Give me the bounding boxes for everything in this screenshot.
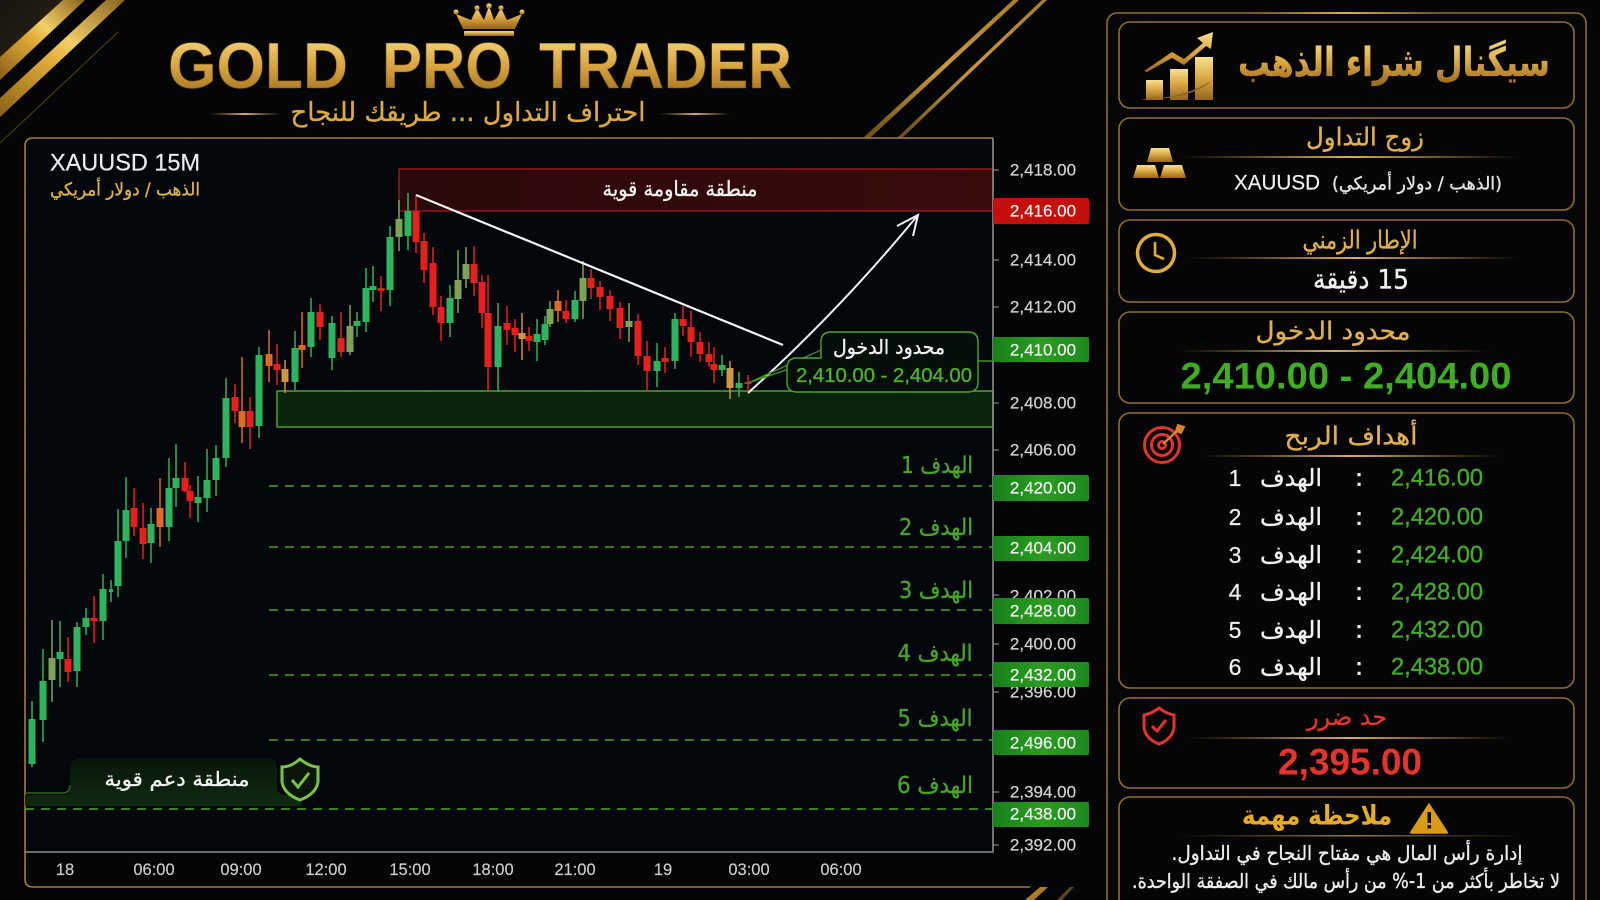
decorative gold stripes top left: [0, 0, 125, 143]
panel: header: [1119, 22, 1574, 108]
price tags: 2,404.00: [1010, 538, 1076, 558]
icon: gold bars: [1133, 148, 1186, 178]
panel: trading pair: (الذهب / دولار أمريكي): [1332, 172, 1502, 194]
target row 3: 3: [1229, 542, 1241, 568]
panel: price chart: [25, 138, 1089, 887]
panel: entry limit: 2,410.00 - 2,404.00: [1180, 356, 1512, 396]
target row 6: 2,438.00: [1391, 654, 1483, 680]
time axis labels: 06:00: [820, 861, 862, 879]
target lines with labels: [25, 453, 993, 809]
resistance zone: منطقة مقاومة قوية: [602, 177, 758, 201]
target lines with labels: الهدف 3: [899, 578, 973, 604]
panel: important note: ملاحظة مهمة: [1242, 800, 1392, 832]
panel: important note: لا تخاطر بأكثر من 1-% من رأس مالك في الصفقة الواحدة.: [1132, 867, 1560, 894]
target row 1: 2,416.00: [1391, 464, 1483, 492]
target lines with labels: الهدف 4: [898, 641, 972, 667]
entry callout: [748, 332, 993, 392]
icon: green shield: [282, 759, 318, 800]
panel: signal sidebar: [1107, 12, 1586, 900]
panel: entry limit: محدود الدخول: [1256, 316, 1410, 346]
icon: clock: [1138, 234, 1174, 272]
time axis labels: 15:00: [389, 861, 431, 879]
time axis labels: [56, 861, 862, 879]
target row 4: 4: [1229, 579, 1242, 605]
target row 2: 2: [1229, 504, 1241, 530]
target row 1: الهدف: [1260, 464, 1322, 492]
chart heading: symbol: الذهب / دولار أمريكي: [50, 178, 200, 200]
price axis: 2,408.00: [1010, 394, 1076, 412]
target row 5: :: [1356, 618, 1362, 642]
target row 6: 6: [1229, 654, 1241, 680]
arrow: upward projection: [748, 215, 918, 393]
price axis: 2,414.00: [1010, 250, 1076, 270]
time axis labels: 09:00: [220, 861, 262, 879]
panel: trading pair: [1119, 118, 1574, 210]
price tags: 2,438.00: [1010, 804, 1076, 824]
panel: timeframe: [1119, 220, 1574, 302]
price tags: 2,428.00: [1010, 602, 1076, 620]
target row 1: [1229, 464, 1483, 492]
target row 2: :: [1356, 504, 1362, 530]
support zone rectangle: [277, 391, 993, 427]
target row 5: الهدف: [1260, 616, 1322, 644]
target row 2: [1229, 503, 1483, 531]
decorative gold stripes top right: [863, 0, 1074, 900]
icon: rising chart: [1141, 32, 1213, 100]
target row 3: 2,424.00: [1391, 542, 1483, 568]
price axis: 2,402.00: [1010, 586, 1076, 606]
target row 4: الهدف: [1260, 578, 1322, 606]
support callout: منطقة دعم قوية: [104, 767, 250, 791]
price tags: 2,410.00: [1010, 340, 1076, 360]
time axis labels: 06:00: [133, 861, 175, 879]
icon: crown: [454, 3, 524, 36]
target lines with labels: الهدف 2: [899, 515, 973, 541]
target row 3: :: [1356, 542, 1362, 568]
target row 6: الهدف: [1260, 653, 1322, 681]
title: GOLD PRO TRADER: [168, 29, 792, 102]
target row 2: 2,420.00: [1391, 504, 1483, 530]
panel: stop loss: 2,395.00: [1278, 742, 1422, 782]
target row 3: الهدف: [1260, 541, 1322, 569]
target row 5: [1229, 616, 1483, 644]
entry callout: محدود الدخول: [833, 335, 945, 359]
target lines with labels: الهدف 6: [897, 773, 973, 799]
subtitle with flanking lines: احتراف التداول ... طريقك للنجاح: [290, 98, 646, 128]
panel: profit targets: [1119, 413, 1574, 688]
icon: red shield: [1144, 708, 1174, 744]
chart heading: symbol: [50, 150, 200, 200]
price axis: 2,392.00: [1010, 836, 1076, 854]
panel: stop loss: حد ضرر: [1306, 703, 1387, 731]
price axis: [25, 138, 1076, 854]
time axis labels: 03:00: [728, 861, 770, 879]
time axis labels: 18: [56, 861, 74, 879]
trend line: [416, 195, 783, 345]
panel: important note: [1119, 797, 1574, 900]
support callout: [25, 758, 302, 806]
resistance zone: [399, 169, 993, 211]
panel: stop loss: [1119, 698, 1574, 788]
time axis labels: 19: [654, 861, 672, 879]
chart heading: symbol: XAUUSD 15M: [50, 150, 200, 176]
price axis: 2,412.00: [1010, 298, 1076, 316]
panel: profit targets: أهداف الربح: [1284, 418, 1418, 452]
price tags: 2,496.00: [1010, 734, 1076, 752]
target row 6: [1229, 653, 1483, 681]
target row 4: [1229, 578, 1483, 606]
target row 5: 2,432.00: [1391, 616, 1483, 644]
panel: important note: إدارة رأس المال هي مفتاح النجاح في التداول.: [1172, 840, 1522, 866]
target row 3: [1229, 541, 1483, 569]
target row 4: :: [1356, 580, 1362, 604]
price axis: 2,394.00: [1010, 782, 1076, 802]
price axis: 2,406.00: [1010, 440, 1076, 460]
icon: warning triangle: [1411, 804, 1447, 833]
panel: entry limit: [1119, 312, 1574, 403]
time axis labels: 18:00: [472, 861, 514, 879]
target row 6: :: [1356, 654, 1362, 680]
target row 4: 2,428.00: [1391, 578, 1483, 606]
price axis: 2,418.00: [1010, 160, 1076, 180]
target lines with labels: الهدف 1: [901, 453, 973, 479]
price tags: [993, 198, 1089, 827]
icon: target: [1144, 425, 1184, 462]
title: GOLD PRO TRADER: TRADER: [539, 29, 792, 102]
panel: timeframe: 15 دقيقة: [1313, 264, 1409, 296]
target row 5: 5: [1229, 617, 1241, 643]
target row 1: :: [1356, 466, 1362, 490]
price tags: 2,420.00: [1010, 478, 1076, 498]
target row 2: الهدف: [1260, 503, 1322, 531]
price axis: 2,396.00: [1010, 682, 1076, 702]
title: GOLD PRO TRADER: PRO: [382, 29, 512, 102]
price tags: 2,432.00: [1010, 666, 1076, 684]
price tags: 2,416.00: [1010, 202, 1076, 220]
target row 1: 1: [1229, 465, 1241, 491]
entry callout: 2,410.00 - 2,404.00: [796, 365, 972, 387]
time axis labels: 12:00: [305, 861, 347, 879]
panel: trading pair: XAUUSD: [1234, 172, 1320, 194]
candlesticks: [32, 193, 748, 767]
target lines with labels: الهدف 5: [898, 706, 972, 732]
panel: trading pair: زوج التداول: [1306, 122, 1424, 152]
title: GOLD PRO TRADER: GOLD: [168, 29, 348, 102]
price axis: 2,400.00: [1010, 634, 1076, 654]
panel: timeframe: الإطار الزمني: [1302, 226, 1418, 254]
time axis labels: 21:00: [554, 861, 596, 879]
